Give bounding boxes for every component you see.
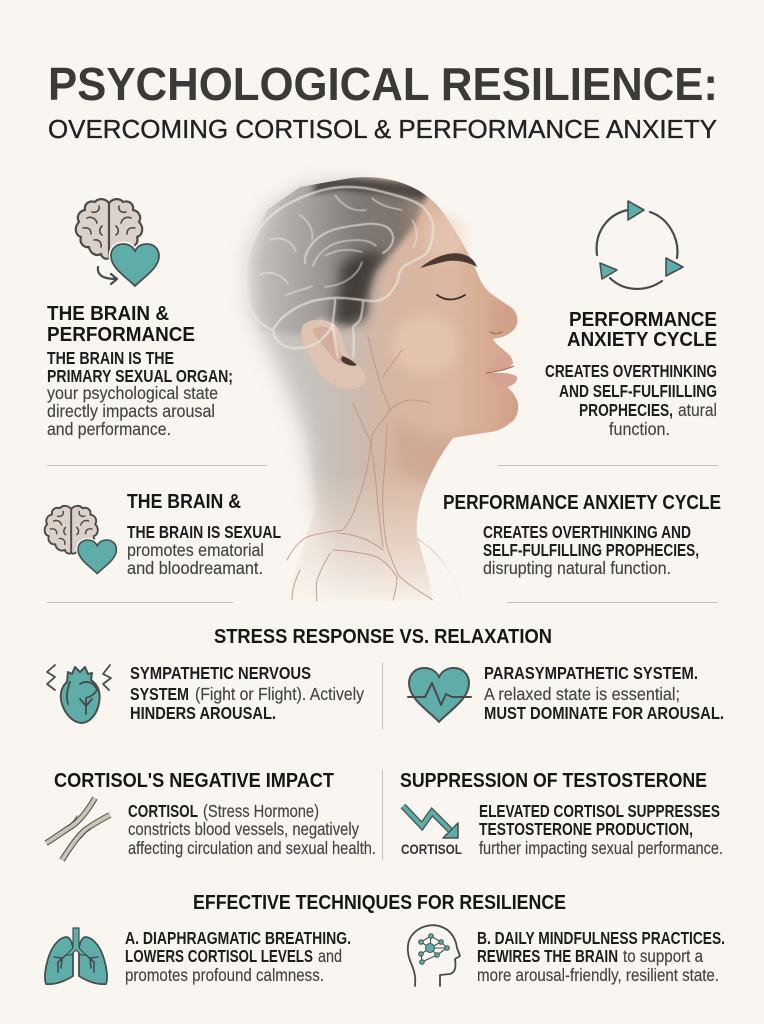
body text (130, 663, 364, 723)
body text (484, 663, 724, 723)
body text: HINDERS AROUSAL. (130, 703, 276, 723)
body text: more arousal-friendly, resilient state. (477, 965, 719, 985)
body text: REWIRES THE BRAIN (477, 946, 618, 966)
heading: effective techniques: EFFECTIVE TECHNIQUES FOR RESILIENCE (193, 892, 566, 914)
panel: parasympathetic system (408, 663, 724, 723)
body text: CREATES OVERTHINKING AND (483, 522, 691, 542)
panel: the brain and performance, upper left (47, 199, 233, 439)
icon: anatomical heart with lightning (47, 665, 111, 723)
body text: atural (678, 400, 717, 420)
body text: directly impacts arousal (47, 401, 215, 421)
icon: head with neural network (408, 925, 460, 986)
body text (47, 348, 233, 439)
body text: THE BRAIN IS THE (47, 348, 174, 368)
icon: constricted blood vessels (46, 798, 110, 860)
body text (128, 801, 376, 858)
body text: your psychological state (47, 383, 218, 403)
body text: constricts blood vessels, negatively (128, 819, 359, 839)
body text: (Fight or Flight). Actively (195, 684, 364, 704)
veins in neck and chest (287, 337, 433, 601)
body text: and performance. (47, 419, 171, 439)
title: PSYCHOLOGICAL RESILIENCE: (48, 58, 718, 110)
icon label: CORTISOL (401, 842, 462, 857)
body text: SYMPATHETIC NERVOUS (130, 663, 311, 683)
brain overlay (245, 187, 433, 357)
heading: SUPPRESSION OF TESTOSTERONE (400, 770, 707, 792)
white top at shoulder (418, 540, 462, 602)
heading: stress response vs relaxation: STRESS RESPONSE VS. RELAXATION (214, 626, 552, 648)
body text (545, 361, 717, 439)
soft grey fade behind head (249, 182, 400, 540)
body text: promotes profound calmness. (125, 965, 324, 985)
dark hair band on crown (312, 176, 430, 200)
panel: performance anxiety cycle, second row right (443, 492, 721, 578)
icon: brain with heart (76, 199, 159, 286)
heading (47, 303, 195, 346)
body text: A relaxed state is essential; (484, 684, 680, 704)
ear (301, 320, 365, 389)
icon: cycle of three arrows (597, 201, 683, 289)
body text: THE BRAIN IS SEXUAL (127, 522, 281, 542)
panel: cortisol's negative impact (46, 770, 376, 860)
heading: PERFORMANCE ANXIETY CYCLE (443, 492, 721, 514)
panel: suppression of testosterone (400, 770, 723, 858)
panel: the brain, second row left (45, 491, 281, 578)
panel: daily mindfulness practices (408, 925, 725, 986)
nose shading (490, 300, 516, 336)
inner ear (313, 327, 349, 364)
subtitle: OVERCOMING CORTISOL & PERFORMANCE ANXIETY (48, 114, 717, 144)
body text: to support a (623, 946, 703, 966)
mouth line (486, 366, 514, 373)
body text (479, 801, 723, 858)
icon: heart with pulse line (408, 668, 471, 722)
icon: lungs (45, 928, 107, 984)
body text: PARASYMPATHETIC SYSTEM. (484, 663, 698, 683)
body text: PROPHECIES, (579, 400, 673, 420)
neck lightening (294, 487, 462, 602)
body text (483, 522, 699, 578)
face and neck (247, 177, 518, 602)
under-jaw shading (398, 429, 466, 486)
body text: CREATES OVERTHINKING (545, 361, 717, 381)
heading: THE BRAIN & (127, 491, 241, 513)
heading: CORTISOL'S NEGATIVE IMPACT (54, 770, 334, 792)
panel: performance anxiety cycle, upper right (545, 201, 717, 439)
panel: diaphragmatic breathing (45, 928, 351, 985)
body text: and (318, 946, 342, 966)
eyebrow (420, 253, 477, 268)
body text: LOWERS CORTISOL LEVELS (125, 946, 313, 966)
body text: further impacting sexual performance. (479, 838, 723, 858)
lips (486, 353, 517, 387)
body text: (Stress Hormone) (203, 801, 319, 821)
icon: small brain with heart (45, 506, 116, 574)
body text: promotes ematorial (127, 540, 264, 560)
dark hair near the temple (335, 251, 385, 326)
body text: SELF-FULFILLING PROPHECIES, (483, 540, 699, 560)
heading: PERFORMANCE (47, 324, 195, 346)
body text (477, 928, 725, 985)
central portrait: profile of a woman with brain overlay (240, 172, 518, 605)
body text (127, 522, 281, 578)
body text: PRIMARY SEXUAL ORGAN; (47, 366, 233, 386)
body text: MUST DOMINATE FOR AROUSAL. (484, 703, 724, 723)
body text: disrupting natural function. (483, 558, 671, 578)
body text: AND SELF-FULFIILLING (559, 381, 717, 401)
body text: TESTOSTERONE PRODUCTION, (479, 819, 693, 839)
heading: PERFORMANCE (569, 309, 717, 331)
title (48, 58, 718, 144)
body text (125, 928, 351, 985)
body text: affecting circulation and sexual health. (128, 838, 376, 858)
body text: and bloodreamant. (127, 558, 263, 578)
heading: THE BRAIN & (47, 303, 169, 325)
heading (567, 309, 717, 351)
cheek and forehead highlights (391, 214, 465, 375)
ear canal (341, 356, 357, 366)
body text: A. DIAPHRAGMATIC BREATHING. (125, 928, 351, 948)
nostril (490, 332, 502, 334)
body text: CORTISOL (128, 801, 198, 821)
icon: cortisol arrow trending down (403, 806, 458, 838)
heading: ANXIETY CYCLE (567, 329, 717, 351)
hair (254, 177, 428, 336)
body text: SYSTEM (130, 684, 189, 704)
closed eye (437, 295, 465, 300)
body text: function. (609, 419, 670, 439)
panel: sympathetic nervous system (47, 663, 364, 723)
